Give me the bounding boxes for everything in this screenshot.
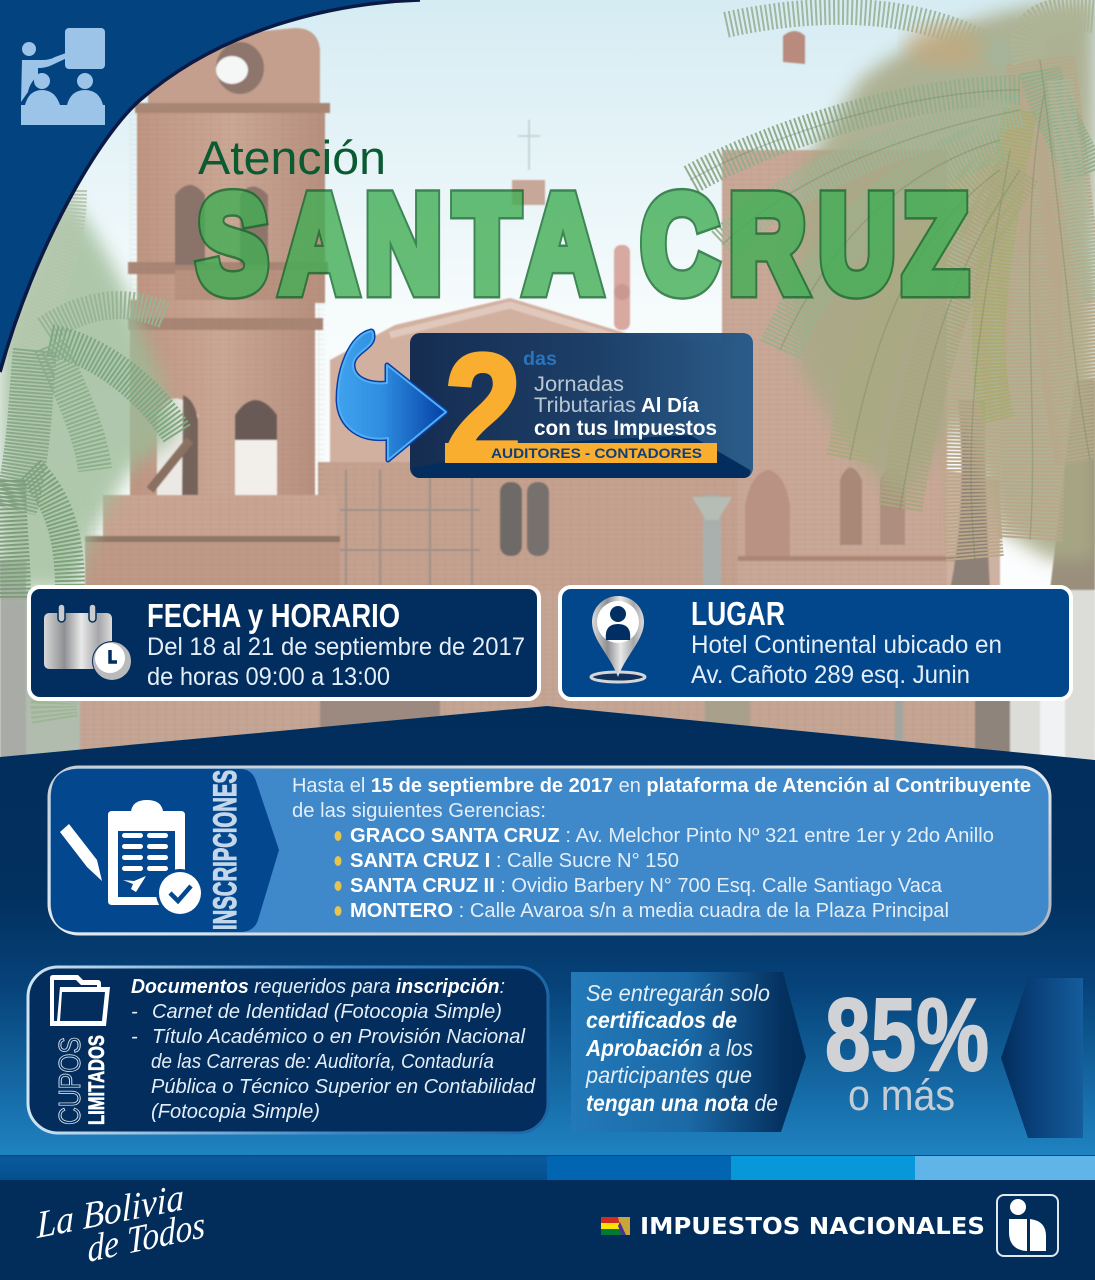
audience bar: [445, 443, 717, 463]
panel: inscripciones: [49, 767, 1050, 934]
label: das: das: [523, 349, 557, 370]
document list: -: [131, 1001, 138, 1023]
icon: clipboard with check: [60, 800, 204, 917]
notice text: Se entregarán solo: [586, 980, 770, 1006]
office list: [334, 824, 994, 922]
notice text: tengan una nota de: [586, 1090, 778, 1116]
title: Atención: Atención: [198, 131, 386, 184]
stat: 85% o más: [825, 977, 989, 1120]
document list: -: [131, 1026, 138, 1048]
decorative right chevron: [1001, 978, 1083, 1138]
document list: Documentos requeridos para inscripción:: [131, 976, 505, 998]
vertical label: limitados: LIMITADOS: [84, 1035, 109, 1125]
slogan: La Bolivia de Todos: [36, 1176, 206, 1271]
date and time: Del 18 al 21 de septiembre de 2017: [147, 633, 525, 661]
stat: 85% o más: 85%: [825, 977, 989, 1092]
notice text: participantes que: [585, 1062, 752, 1088]
panel: fecha y horario: [29, 587, 539, 699]
title: SANTA CRUZ: SANTA CRUZ: [198, 167, 968, 320]
street lamp and palm trunks: [0, 380, 1095, 760]
document list: (Fotocopia Simple): [151, 1101, 320, 1123]
lower facade behind info boxes: [0, 590, 1095, 760]
right palm tree: [690, 0, 1095, 560]
left bell tower: [85, 28, 340, 590]
panel: documentos requeridos: [28, 967, 548, 1133]
address: Av. Cañoto 289 esq. Junin: [691, 661, 970, 689]
document list: de las Carreras de: Auditoría, Contaduría: [151, 1051, 494, 1073]
icon: calendar and clock: [44, 604, 132, 680]
footer band: [0, 1180, 1095, 1280]
office list: GRACO SANTA CRUZ : Av. Melchor Pinto Nº 321 entre 1er y 2do Anillo: [350, 824, 994, 847]
notice text: Aprobación a los: [585, 1035, 753, 1061]
central church facade: [318, 120, 738, 590]
document list: Título Académico o en Provisión Nacional: [152, 1026, 526, 1048]
icon: location pin: [591, 596, 645, 682]
workshop name: [534, 373, 717, 440]
slogan: La Bolivia de Todos: La Bolivia: [36, 1176, 184, 1247]
audience bar: AUDITORES - CONTADORES: [491, 445, 702, 461]
logo: impuestos nacionales: [997, 1195, 1058, 1256]
stat: 85% o más: o más: [848, 1071, 955, 1120]
bottom section background: [0, 706, 1095, 1156]
arrow: curved blue: [338, 331, 446, 460]
top-left corner panel: [0, 0, 420, 372]
document list: [131, 976, 536, 1123]
workshop name: Jornadas: [534, 373, 624, 396]
icon: folder: [50, 975, 110, 1026]
big number 2: 2: [445, 323, 521, 493]
document list: Carnet de Identidad (Fotocopia Simple): [152, 1001, 502, 1023]
brand name: IMPUESTOS NACIONALES: [640, 1214, 985, 1240]
notice text: [585, 980, 778, 1116]
panel: lugar: [560, 587, 1071, 699]
heading: LUGAR: [691, 595, 785, 632]
workshop name: con tus Impuestos: [534, 417, 717, 440]
address: [691, 631, 1002, 689]
color strip: [0, 1155, 1095, 1180]
office list: SANTA CRUZ II : Ovidio Barbery N° 700 Esq. Calle Santiago Vaca: [350, 874, 943, 897]
right tower: [720, 31, 1000, 590]
slogan: La Bolivia de Todos: de Todos: [87, 1204, 206, 1271]
address: Hotel Continental ubicado en: [691, 631, 1002, 659]
workshop name: Al Día: [641, 395, 700, 417]
deadline text: Hasta el 15 de septiembre de 2017 en plataforma de Atención al Contribuyente: [292, 774, 1031, 797]
vertical label: cupos: CUPOS: [52, 1037, 87, 1125]
deadline text: de las siguientes Gerencias:: [292, 799, 546, 822]
icon: presentation with audience: [21, 28, 105, 125]
deadline text: [292, 774, 1031, 822]
badge: 2 days tax workshop: [410, 323, 753, 493]
left palm tree: [0, 190, 178, 720]
panel: certificate notice: [571, 972, 806, 1132]
office list: MONTERO : Calle Avaroa s/n a media cuadra de la Plaza Principal: [350, 899, 949, 922]
icon: bolivian flag: [601, 1217, 630, 1235]
notice text: certificados de: [586, 1007, 737, 1033]
document list: Pública o Técnico Superior en Contabilidad: [151, 1076, 536, 1098]
workshop name: Tributarias: [534, 394, 636, 417]
date and time: de horas 09:00 a 13:00: [147, 663, 390, 691]
arrow tab: [51, 769, 279, 932]
date and time: [147, 633, 525, 691]
office list: SANTA CRUZ I : Calle Sucre N° 150: [350, 849, 679, 872]
vertical label: inscripciones: INSCRIPCIONES: [207, 770, 243, 930]
background photo: cathedral and palm trees: [0, 0, 1095, 770]
heading: FECHA y HORARIO: [147, 597, 400, 634]
title: SANTA CRUZ: SANTA CRUZ: [198, 167, 968, 320]
